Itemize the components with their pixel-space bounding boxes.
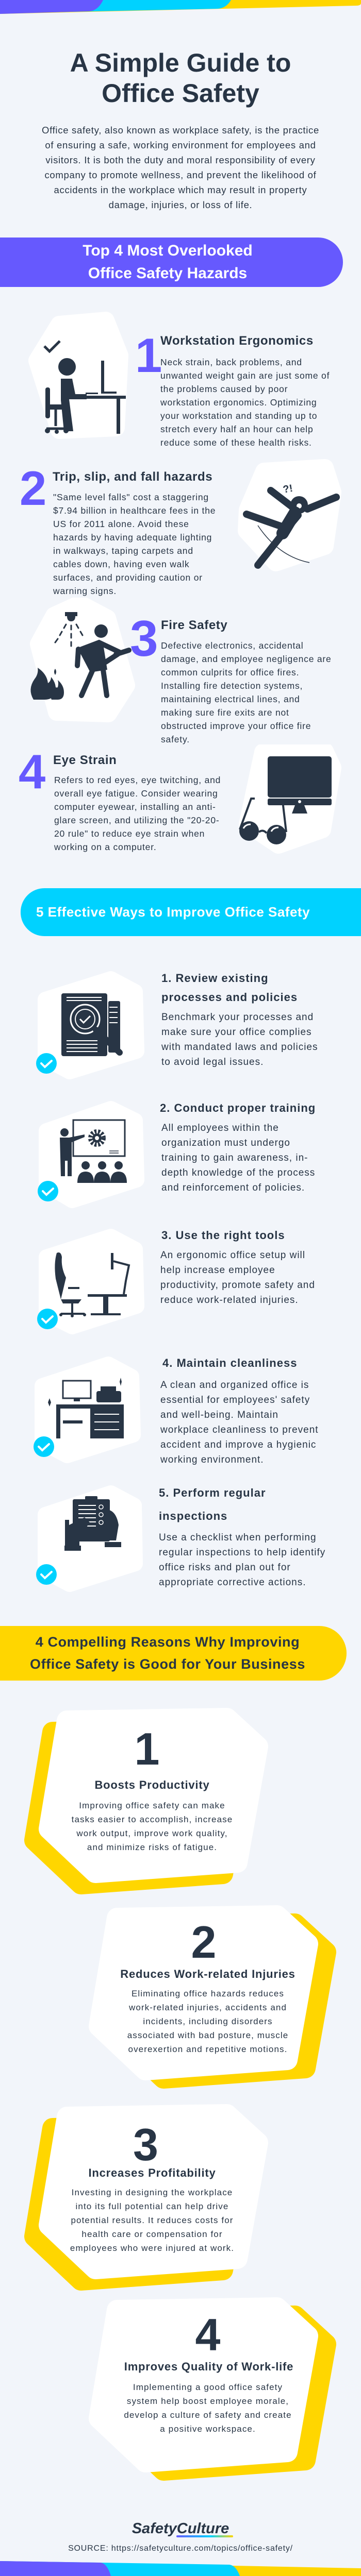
heading: 2. Conduct proper training — [160, 1101, 316, 1114]
body text: 20 rule" to reduce eye strain when — [54, 828, 205, 839]
number 3: 3 — [133, 2119, 158, 2170]
hazard 4: eye strain — [19, 744, 341, 854]
heading: Boosts Productivity — [94, 1778, 209, 1791]
body text: reduce work-related injuries. — [160, 1295, 299, 1306]
body text: tasks easier to accomplish, increase — [72, 1815, 233, 1824]
check badge — [36, 1564, 57, 1585]
body text: overall eye fatigue. Consider wearing — [54, 788, 218, 799]
body text: surfaces, and providing caution or — [53, 572, 203, 583]
heading: inspections — [159, 1510, 227, 1522]
check badge — [34, 1436, 54, 1457]
check badge — [36, 1053, 57, 1074]
body text — [160, 1250, 315, 1306]
body text: reduce some of these health risks. — [160, 437, 312, 448]
logo: SafetyCulture: SafetyCulture — [132, 2520, 229, 2537]
body text: health care or compensation for — [81, 2229, 223, 2239]
body text: $7.94 billion in healthcare fees in the — [53, 505, 216, 516]
body text: regular inspections to help identify — [159, 1547, 325, 1558]
intro paragraph: damage, injuries, or loss of life. — [109, 199, 252, 210]
body text: Eliminating office hazards reduces — [132, 1989, 284, 1998]
icon: falling person: ?! — [282, 483, 293, 496]
title: Office Safety — [102, 79, 259, 108]
heading: Trip, slip, and fall hazards — [53, 470, 212, 484]
body text: training to gain awareness, in- — [161, 1153, 308, 1163]
body text: damage, and employee negligence are — [161, 654, 332, 664]
body text: working environment. — [160, 1454, 264, 1465]
body text — [54, 775, 221, 852]
body text: productivity, promote safety and — [160, 1280, 315, 1291]
number 2: 2 — [20, 461, 46, 515]
number 1: 1 — [135, 328, 162, 382]
bottom color bar — [0, 2560, 361, 2576]
heading: Reduces Work-related Injuries — [120, 1968, 296, 1980]
body text — [0, 2185, 304, 2255]
number 3: 3 — [130, 610, 158, 667]
body text: cables down, having even walk — [53, 559, 189, 569]
heading: 5. Perform regular — [159, 1486, 266, 1499]
way 5: inspections — [36, 1485, 325, 1592]
body text: An ergonomic office setup will — [160, 1250, 305, 1261]
body text: system help boost employee morale, — [127, 2396, 289, 2406]
body text: Benchmark your processes and — [161, 1012, 314, 1023]
banner: 4 compelling reasons: 4 Compelling Reasons Why Improving — [36, 1634, 300, 1650]
intro paragraph — [42, 125, 319, 210]
way 1: review processes — [36, 971, 318, 1079]
way 4: cleanliness — [34, 1357, 319, 1465]
body text — [161, 640, 332, 744]
body text: appropriate corrective actions. — [159, 1577, 306, 1588]
body text: stretch every half an hour can help — [160, 424, 314, 434]
body text: Use a checklist when performing — [159, 1532, 317, 1543]
body text: develop a culture of safety and create — [124, 2410, 292, 2420]
body text — [160, 357, 330, 448]
title: A Simple Guide to — [70, 48, 291, 77]
intro paragraph: Office safety, also known as workplace safety, is the practice — [42, 125, 319, 135]
way 3: right tools — [37, 1229, 315, 1334]
body text: work output, improve work quality, — [76, 1828, 228, 1838]
body text: warning signs. — [53, 586, 117, 596]
body text: Installing fire detection systems, — [161, 681, 303, 691]
card shape — [24, 1708, 268, 1894]
heading — [159, 1486, 266, 1522]
body text: Refers to red eyes, eye twitching, and — [54, 775, 221, 785]
body text: associated with bad posture, muscle — [127, 2030, 288, 2040]
hazard 2: trip slip fall — [20, 459, 341, 596]
body text — [53, 492, 216, 596]
source: SOURCE: https://safetyculture.com/topics/office-safety/ — [68, 2544, 293, 2553]
icon: person at desk — [28, 312, 128, 439]
body text: working on a computer. — [54, 842, 157, 852]
card shape — [24, 2104, 268, 2291]
body text: maintaining electrical lines, and — [161, 694, 300, 704]
body text: "Same level falls" cost a staggering — [53, 492, 209, 502]
body text — [160, 1380, 319, 1465]
body text: and minimize risks of fatigue. — [87, 1842, 217, 1852]
body text: and reinforcement of policies. — [161, 1182, 305, 1193]
heading: 3. Use the right tools — [161, 1229, 285, 1242]
number 4: 4 — [19, 744, 45, 799]
heading: 4. Maintain cleanliness — [162, 1357, 297, 1369]
intro paragraph: of ensuring a safe, working environment for employees and — [45, 140, 316, 150]
check badge — [38, 1181, 58, 1201]
body text — [161, 1012, 318, 1067]
banner: 5 effective ways — [21, 888, 361, 936]
body text: Implementing a good office safety — [133, 2382, 283, 2392]
body text: Neck strain, back problems, and — [160, 357, 302, 367]
card shape — [0, 2290, 361, 2490]
heading: Fire Safety — [161, 618, 227, 632]
heading: Workstation Ergonomics — [160, 334, 314, 348]
card shape — [89, 1905, 336, 2089]
body text: help increase employee — [160, 1265, 275, 1276]
heading: 1. Review existing — [161, 972, 269, 985]
body text: accident and improve a hygienic — [160, 1439, 316, 1450]
body text: with mandated laws and policies — [161, 1042, 318, 1053]
banner: 4 compelling reasons: Office Safety is Good for Your Business — [30, 1656, 305, 1672]
body text: office risks and plan out for — [159, 1562, 291, 1573]
top color bar — [0, 0, 361, 14]
icon: monitor and glasses — [239, 744, 341, 854]
logo: SafetyCulture — [119, 2519, 242, 2539]
body text: unwanted weight gain are just some of — [160, 370, 330, 381]
body text: in walkways, taping carpets and — [53, 546, 193, 556]
body text: common culprits for office fires. — [161, 667, 299, 677]
way 2: training — [38, 1101, 316, 1208]
heading — [161, 972, 298, 1004]
heading: Increases Profitability — [88, 2166, 216, 2179]
icon: fire sprinkler and person — [30, 598, 135, 722]
body text — [0, 2380, 361, 2436]
number 2: 2 — [191, 1917, 216, 1968]
body text: Defective electronics, accidental — [161, 640, 303, 651]
hazard 3: fire safety — [30, 598, 332, 744]
icon: presenter and audience — [38, 1101, 144, 1208]
banner: top 4 hazards: Office Safety Hazards — [88, 265, 247, 282]
icon: document with magnifier — [36, 971, 144, 1079]
reason 4: quality of work-life — [0, 2290, 361, 2490]
body text: organization must undergo — [161, 1138, 290, 1148]
banner: 5 effective ways: 5 Effective Ways to Improve Office Safety — [36, 904, 310, 920]
heading: processes and policies — [161, 991, 298, 1004]
reason 3: profitability — [24, 2104, 268, 2291]
body text: potential results. It reduces costs for — [71, 2215, 234, 2225]
body text: workstation ergonomics. Optimizing — [160, 397, 317, 408]
icon: falling person — [238, 459, 341, 571]
body text: a positive workspace. — [160, 2424, 256, 2434]
body text: the problems caused by poor — [160, 384, 288, 394]
intro paragraph: visitors. It is both the duty and moral responsibility of every — [45, 155, 316, 165]
heading: Improves Quality of Work-life — [124, 2360, 293, 2373]
body text: incidents, including disorders — [143, 2016, 273, 2026]
icon: clean desk — [34, 1357, 141, 1463]
body text: to avoid legal issues. — [161, 1057, 264, 1067]
body text — [161, 1123, 315, 1193]
banner: top 4 hazards — [0, 238, 343, 287]
body text: Investing in designing the workplace — [72, 2188, 233, 2197]
icon: ergonomic chair and desk — [37, 1229, 144, 1334]
banner: 4 compelling reasons — [0, 1626, 347, 1681]
body text: make sure your office complies — [161, 1027, 312, 1038]
body text: depth knowledge of the process — [161, 1167, 315, 1178]
body text: glare screen, and utilizing the "20-20- — [54, 815, 220, 825]
body text: All employees within the — [161, 1123, 279, 1133]
body text: making sure fire exits are not — [161, 707, 289, 718]
hazard 1: workstation ergonomics — [28, 312, 330, 448]
body text: essential for employees' safety — [160, 1395, 310, 1405]
body text: overexertion and repetitive motions. — [128, 2044, 287, 2054]
body text: employees who were injured at work. — [70, 2243, 234, 2253]
reason 2: reduces injuries — [89, 1905, 336, 2089]
intro paragraph: accidents in the workplace which may result in property — [54, 184, 307, 195]
body text: A clean and organized office is — [160, 1380, 309, 1391]
body text: work-related injuries, accidents and — [129, 2003, 287, 2012]
icon: hands holding checklist — [36, 1485, 143, 1592]
body text — [71, 1801, 233, 1852]
body text: and well-being. Maintain — [160, 1410, 278, 1420]
body text: Improving office safety can make — [79, 1801, 225, 1810]
body text: safety. — [161, 734, 190, 744]
body text: obstructed improve your office fire — [161, 721, 311, 731]
body text — [159, 1532, 325, 1588]
body text: computer eyewear, installing an anti- — [54, 802, 216, 812]
reason 1: boosts productivity — [24, 1708, 268, 1894]
number 4: 4 — [195, 2309, 220, 2360]
banner: top 4 hazards: Top 4 Most Overlooked — [83, 242, 253, 259]
body text: hazards by having adequate lighting — [53, 532, 212, 543]
body text: workplace cleanliness to prevent — [160, 1425, 319, 1435]
title — [70, 48, 291, 108]
intro paragraph: company to promote wellness, and prevent the likelihood of — [44, 170, 317, 180]
body text: into its full potential can help drive — [76, 2201, 228, 2211]
number 1: 1 — [135, 1723, 159, 1774]
body text: your workstation and standing up to — [160, 411, 317, 421]
body text: US for 2011 alone. Avoid these — [53, 519, 189, 529]
heading: Eye Strain — [53, 753, 117, 767]
check badge — [37, 1309, 58, 1329]
body text — [127, 1989, 288, 2054]
